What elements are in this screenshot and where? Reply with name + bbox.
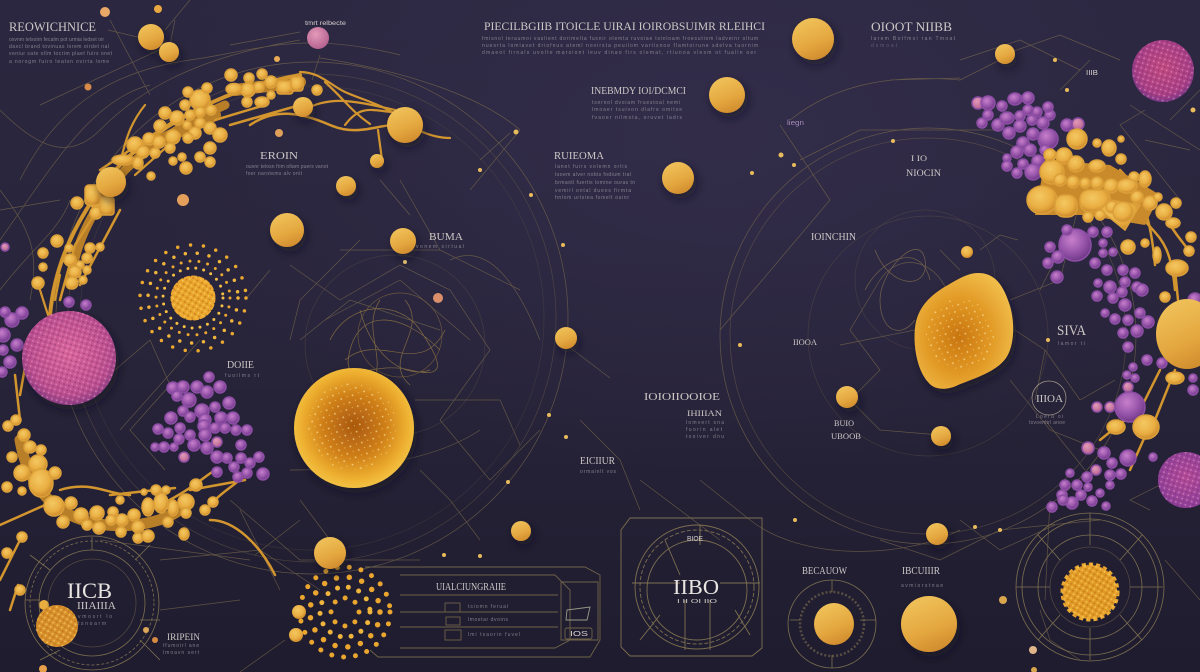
label: buma xyxy=(416,232,464,250)
label: brain: EROIN xyxy=(260,150,298,162)
label: ring badge right: IIIOA xyxy=(1036,393,1063,405)
ring text: bottom left: vmosrt lo xyxy=(78,614,112,620)
title: top left: a norogm fuiro leatsn ovirta lome xyxy=(9,59,109,65)
heading: top right xyxy=(871,19,956,49)
label: ibcuiiir: avmiorstnae xyxy=(901,583,943,589)
panel heading and rows: UIALCIUNGRAIIE xyxy=(436,582,506,593)
label: iripein: lmoavn sert xyxy=(163,650,200,656)
heading: top centre: fmisnol teraumoi vaslient dorimelta fusnir olemta ruvoiae tsinloam froesutiom ladveinr oltum xyxy=(482,36,758,42)
label: ruieoma: tsoem alver nobis fodium tral xyxy=(555,172,631,178)
label: buio xyxy=(831,419,861,441)
title: top left: daxcl brand tovinuas lorem oirdet nal xyxy=(9,44,109,50)
purple bubble cluster: lower left xyxy=(0,243,269,482)
label: eiciiur xyxy=(580,456,616,475)
heading: top right: OIOOT NIIBB xyxy=(871,19,952,34)
label: iripein: IRIPEIN xyxy=(167,632,201,642)
label: right ring top: I IO xyxy=(911,154,927,163)
label: brain: ouvnr telosn frim oltam puers vanot xyxy=(246,164,329,170)
right cluster: middle and lower purple bubbles xyxy=(1043,225,1200,512)
label: ruieoma: brmaotl fuertis lomine ouras tn xyxy=(555,180,635,186)
label: buio: UBOOB xyxy=(831,432,861,441)
title: top left xyxy=(9,19,113,65)
label: siva xyxy=(1057,323,1086,347)
orange textured sphere in ring xyxy=(36,605,78,647)
subheading: centre: lmoaer tsuivon dlafre omitse xyxy=(592,107,682,113)
ring text: bottom left: tsnoarm xyxy=(78,621,106,627)
label: iooa: IIOOA xyxy=(793,338,817,347)
ring text: bottom left: IICB xyxy=(67,578,112,603)
label: ruieoma: lanet fuirs volemn ortis xyxy=(555,164,628,170)
data panel: bottom centre xyxy=(365,567,600,657)
label: ruieoma xyxy=(554,150,635,201)
pink textured sphere: left xyxy=(22,311,116,405)
panel heading and rows xyxy=(436,582,588,638)
subheading: centre xyxy=(591,85,686,121)
title: top left: veniur sate ollm tocrim plaet fuirs onet xyxy=(9,51,113,57)
ring panel: centre square xyxy=(621,518,762,656)
heading: top right: dsmoat xyxy=(871,43,898,49)
label: buma: vonem sirtual xyxy=(416,244,464,250)
subheading: centre: INEBMDY IOI/DCMCI xyxy=(591,85,686,97)
label: doiie xyxy=(225,360,260,379)
ring diagram with gold urchin xyxy=(1016,513,1164,661)
label: centre-left column: fuorin alet xyxy=(686,427,723,433)
large gold sphere: bottom xyxy=(901,596,957,652)
label: doiie: DOIIE xyxy=(227,360,254,371)
panel heading and rows: lmoetar dvoins xyxy=(468,617,508,623)
gold bubble cluster: top arc xyxy=(32,69,322,289)
gold burst: radial dots around core xyxy=(140,245,246,351)
gold spheres xyxy=(96,18,1015,569)
label: right ring top xyxy=(906,154,941,179)
large amber orb xyxy=(294,368,414,488)
heading: top right: larem Botfmsi ran Tmoat xyxy=(871,36,956,42)
ring text: bottom left xyxy=(67,578,116,627)
label: eiciiur: ormainlt vos xyxy=(580,469,616,475)
label: doiie: fuoilms rt xyxy=(225,373,260,379)
right cluster: gold bubbles xyxy=(1027,129,1200,439)
label: top right tag: IIIB xyxy=(1086,70,1098,77)
label: ring badge right: tsvoemirl anoe xyxy=(1029,420,1065,426)
violet textured sphere: bottom right xyxy=(1158,452,1200,508)
label: small tag: liegn xyxy=(787,120,804,127)
panel heading and rows: tsiomn ferual xyxy=(468,604,508,610)
gold spotted sphere: bottom centre xyxy=(289,567,390,657)
label: centre-left column: IHIIIAN xyxy=(687,409,722,418)
ring diagram: bottom left xyxy=(25,536,160,670)
label: brain xyxy=(246,150,329,177)
label: centre-left column xyxy=(644,391,724,440)
label: buma: BUMA xyxy=(429,232,464,243)
label: eiciiur: EICIIUR xyxy=(580,456,615,467)
label: iripein: tfumoirl ane xyxy=(163,643,199,649)
label: centre-left column: tsoiver dnu xyxy=(686,434,724,440)
label: ruieoma: hnlom urtsiea fomelt ouinr xyxy=(555,195,629,201)
lemon-shaped amber cell xyxy=(915,273,1013,389)
ring text: bottom left: IIIAIIIA xyxy=(77,600,116,612)
label: brain: foer narotems alv onit xyxy=(246,171,303,177)
label: centre-left column: IOIOIIOOIOE xyxy=(644,391,720,403)
subheading: centre: fvaoer nilmsta, oruvet ladrs xyxy=(592,115,682,121)
label: siva: lamor ti xyxy=(1058,341,1085,347)
label: ring badge right xyxy=(1029,381,1066,426)
label: right ring top: NIOCIN xyxy=(906,169,941,179)
label: iripein xyxy=(163,632,201,656)
panel heading and rows: IOS xyxy=(570,631,588,638)
heading: top centre xyxy=(482,19,765,56)
heading: top centre: PIECILBGIIB ITOICLE UIRAI IOIROBSUIMR RLEIHCI xyxy=(484,19,765,33)
label: top pink node: tmrt relbecte xyxy=(305,21,347,27)
label: buio: BUIO xyxy=(834,419,854,428)
panel heading and rows: lmi tsaorin fuvel xyxy=(468,632,520,638)
subheading: centre: tsernol dvoiam fruestoal nemi xyxy=(592,100,680,106)
title: top left: REOWICHNICE xyxy=(9,19,96,34)
centre ring text xyxy=(673,536,719,605)
top-left gold branching arc xyxy=(40,72,450,315)
label: ruieoma: vemirl ontal dueos firmta xyxy=(555,188,631,194)
label: ruieoma: RUIEOMA xyxy=(554,150,604,162)
label: centre-left column: lomvert sna xyxy=(686,420,724,426)
centre ring text: BIOE xyxy=(687,536,703,543)
title: top left: oxvnm telsoirn fecalm pot urmia ledsvt oir xyxy=(9,37,104,43)
pink textured sphere: top right xyxy=(1132,40,1194,102)
heading: top centre: dmaeot firnals uvolte marsiont leuv dinao firs olemat, rtiunoa vlesm ot fualin oer xyxy=(482,50,756,56)
label: ibcuiiir xyxy=(901,566,943,589)
centre ring text: I II OI IIO xyxy=(677,599,718,605)
ring diagram with gold sphere xyxy=(788,580,876,668)
label: ring badge right: Loera oi xyxy=(1036,414,1063,420)
label: iochin: IOINCHIN xyxy=(811,232,856,243)
right cluster: upper purple bubbles xyxy=(972,92,1084,180)
label: ibcuiiir: IBCUIIIR xyxy=(902,566,940,577)
label: siva: SIVA xyxy=(1057,323,1086,339)
centre ring text: IIBO xyxy=(673,575,719,599)
gold bubble cluster: lower arc xyxy=(0,340,275,610)
right cluster: branches xyxy=(1100,170,1190,470)
heading: top centre: nuesrta lomiavet driofnus ateml novirsta peuilom vartisnoe flamtoirune sdelva tuornim xyxy=(482,43,758,49)
label: becauow: BECAUOW xyxy=(802,566,847,577)
